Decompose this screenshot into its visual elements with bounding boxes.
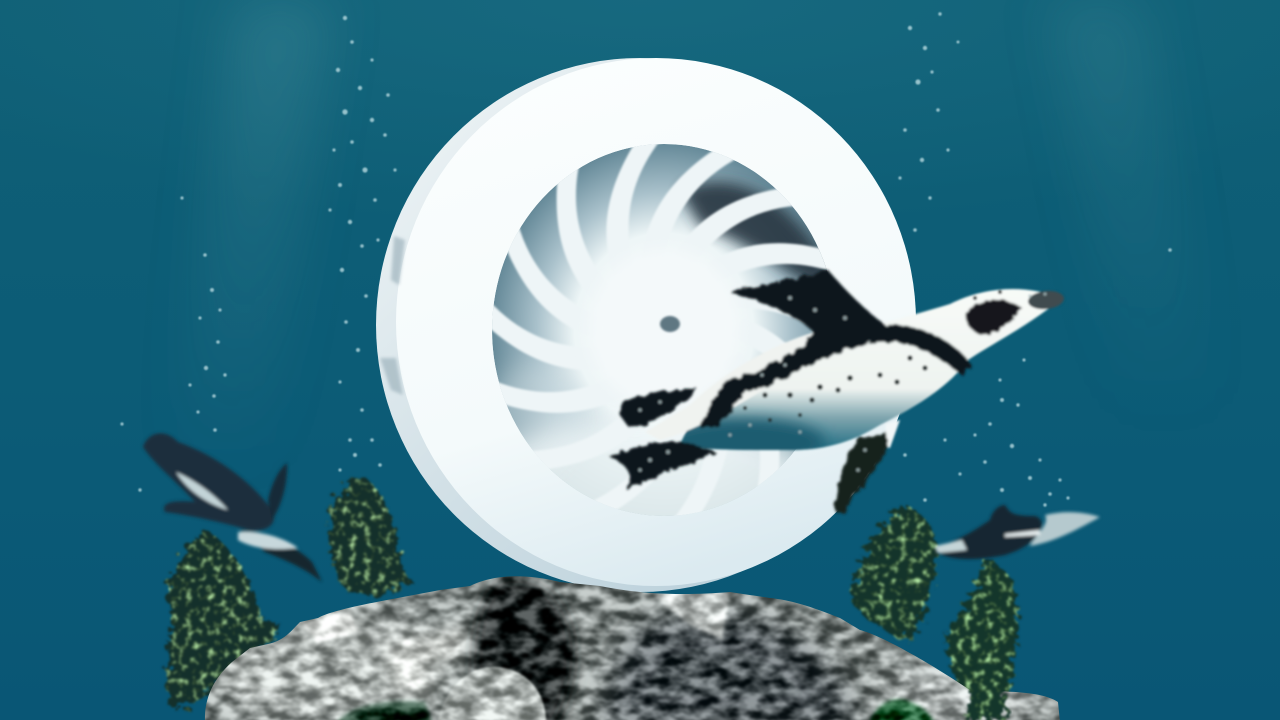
penguin: beak bbox=[1027, 289, 1065, 311]
right small penguin bbox=[935, 505, 1100, 559]
penguin: pale speckles on dark areas bbox=[638, 292, 1047, 472]
rock: dark moss patches bbox=[335, 701, 432, 720]
rock: dark right face bbox=[600, 613, 860, 720]
penguin: eye patch bbox=[966, 300, 1022, 334]
wheel: hub glow bbox=[588, 248, 740, 408]
wheel: dark upper right wells bbox=[680, 182, 840, 291]
penguin: white wheel chip by the flipper bbox=[884, 420, 900, 448]
left penguin: belly stripe bbox=[176, 472, 228, 510]
wheel: inner opening with shaded blade wells bbox=[492, 144, 828, 516]
penguin: dark hind body bbox=[679, 407, 831, 452]
penguin: dark spots bbox=[743, 290, 1002, 422]
right penguin: belly bbox=[1030, 512, 1100, 546]
turbine wheel bbox=[376, 58, 916, 592]
wheel: rim marks bbox=[380, 236, 405, 395]
penguin: white back stripe bbox=[645, 332, 830, 440]
rock base bbox=[204, 576, 1060, 720]
seaweed: left and right clumps bbox=[167, 475, 1018, 720]
left penguin: flipper bbox=[268, 463, 287, 520]
rock: white highlights bbox=[300, 612, 358, 642]
penguin: back markings bbox=[700, 270, 972, 428]
rock: front boulder bbox=[437, 667, 546, 720]
rock: dark crevice bbox=[474, 580, 573, 720]
left penguin: body bbox=[143, 433, 274, 530]
penguin: belly bbox=[680, 289, 1062, 450]
wheel: lower wells lightened bbox=[516, 412, 796, 516]
wheel: blades bbox=[492, 144, 827, 516]
bubbles: columns rising through the water bbox=[120, 12, 1172, 507]
weed over rock bbox=[965, 657, 1006, 720]
left penguin: tail white patch bbox=[238, 532, 298, 549]
right penguin: tail marks bbox=[935, 540, 967, 553]
left small penguin bbox=[143, 433, 322, 582]
light rays bbox=[170, 0, 1220, 480]
rock: left bright face bbox=[210, 610, 450, 720]
left penguin: tail dark bbox=[240, 530, 322, 582]
wheel: axle hole bbox=[660, 316, 680, 332]
wheel: side rim bbox=[376, 58, 904, 592]
rock: right bright face bbox=[880, 666, 1040, 720]
right penguin: body bbox=[935, 505, 1042, 559]
wheel: front face bbox=[396, 58, 916, 586]
main penguin bbox=[610, 270, 1065, 513]
rock: light top bbox=[650, 592, 730, 640]
right penguin: white streak bbox=[1005, 530, 1040, 537]
penguin: upper flipper bbox=[619, 388, 698, 428]
penguin: rear flipper bbox=[835, 433, 887, 513]
penguin: lower flipper bbox=[610, 442, 717, 490]
